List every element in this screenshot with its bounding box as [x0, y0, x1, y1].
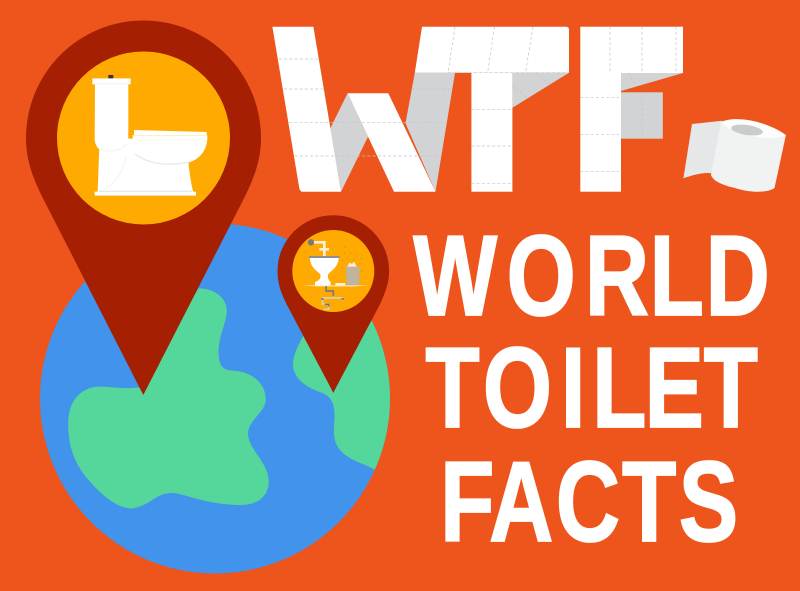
title line: FACTS: FACTS [440, 437, 738, 566]
icon: sink, bin and pipes [302, 239, 370, 309]
letter F [580, 27, 683, 192]
icon: toilet [92, 75, 207, 196]
title line: WORLD: WORLD [413, 211, 770, 339]
small map pin with sink and pipes [278, 215, 389, 393]
large map pin with toilet [26, 20, 261, 395]
icon: toilet paper roll [683, 119, 786, 192]
letter W [272, 27, 455, 192]
globe [40, 224, 397, 574]
title line: TOILET: TOILET [425, 323, 758, 452]
title: World Toilet Facts [413, 211, 770, 566]
letter T [415, 27, 569, 192]
WTF folded letters [272, 27, 683, 192]
